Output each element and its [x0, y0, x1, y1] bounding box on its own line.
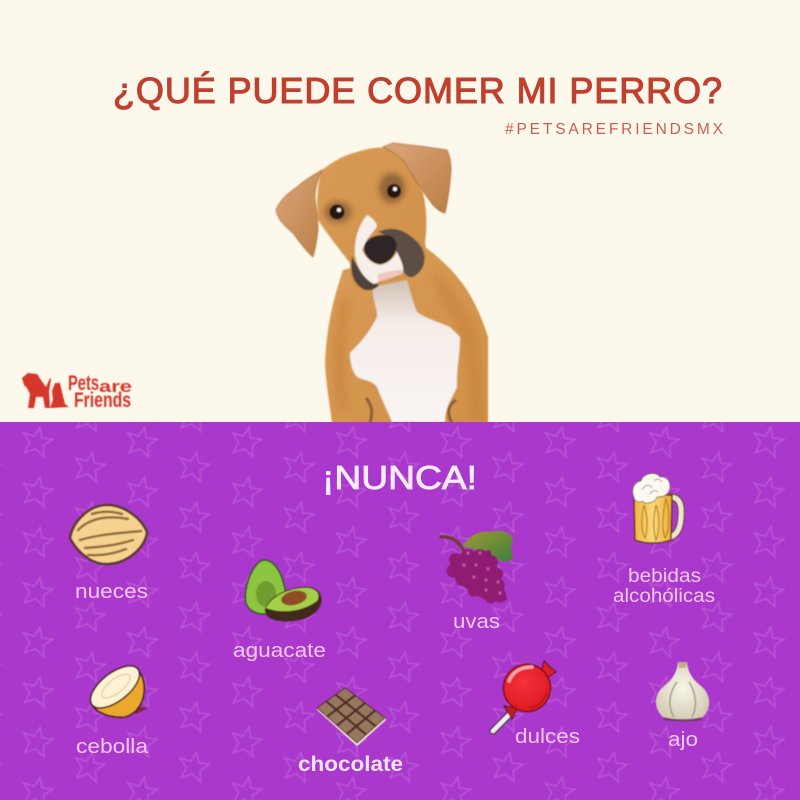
logo small dog [50, 383, 69, 408]
label: aguacate: aguacate [233, 640, 326, 662]
puppy body [325, 247, 488, 423]
icon: walnut [70, 505, 147, 564]
label: bebidas alcohólicas: alcohólicas [613, 586, 715, 607]
puppy head [317, 148, 426, 290]
logo large dog [22, 373, 51, 408]
label: bebidas alcohólicas [613, 566, 715, 607]
shadow [663, 716, 703, 722]
glass [634, 495, 672, 543]
left eye [330, 204, 344, 220]
white chest [350, 280, 460, 422]
cream background [0, 0, 800, 423]
back half [245, 560, 285, 614]
wrapper neck [504, 706, 517, 719]
logo text: Friends: Friends [74, 389, 131, 412]
brow shadows [379, 173, 405, 203]
panel: purple starred section [0, 422, 800, 800]
label: cebolla: cebolla [76, 736, 149, 758]
icon: chocolate bar [317, 688, 386, 746]
front half [265, 587, 322, 621]
right ear [383, 143, 451, 213]
right eye [387, 184, 401, 198]
icon: onion [84, 658, 148, 717]
label: bebidas alcohólicas: bebidas [628, 566, 701, 587]
logo text: Pets: Pets [68, 372, 99, 395]
berry highlights [462, 551, 502, 595]
illustration: puppy [276, 143, 488, 423]
label: ajo: ajo [668, 729, 698, 751]
logo: Pets are Friends [22, 372, 132, 412]
label: uvas: uvas [453, 611, 500, 633]
foam [633, 474, 670, 503]
nose [364, 235, 397, 264]
cut face [84, 658, 146, 716]
berries [446, 549, 506, 604]
body shading [333, 270, 484, 420]
left ear [276, 170, 322, 257]
cluster base [452, 550, 507, 602]
label: nueces: nueces [75, 581, 148, 603]
paw shading [366, 398, 456, 423]
grey muzzle [378, 229, 425, 277]
logo text: are: are [99, 377, 132, 396]
icon: beer mug [633, 474, 681, 543]
white blaze and lower muzzle [355, 215, 403, 284]
stem [130, 706, 148, 714]
leaf [463, 531, 513, 562]
icon: garlic [656, 662, 709, 722]
handle [668, 497, 681, 538]
wrapper tie [541, 661, 556, 681]
icon: grapes [441, 531, 513, 604]
label: dulces: dulces [515, 726, 580, 748]
label: chocolate: chocolate [298, 753, 403, 776]
stick [493, 714, 510, 731]
bulb [92, 668, 144, 717]
hashtag: #PETSAREFRIENDSMX [505, 121, 724, 138]
icon: avocado [245, 560, 322, 621]
title: ¿QUÉ PUEDE COMER MI PERRO? [113, 70, 722, 111]
icon: lollipop [493, 661, 556, 731]
stem [441, 537, 464, 552]
candy [504, 664, 550, 712]
chin pink [378, 270, 403, 282]
heading: NUNCA: ¡NUNCA! [322, 459, 477, 496]
dark muzzle left [351, 256, 379, 290]
